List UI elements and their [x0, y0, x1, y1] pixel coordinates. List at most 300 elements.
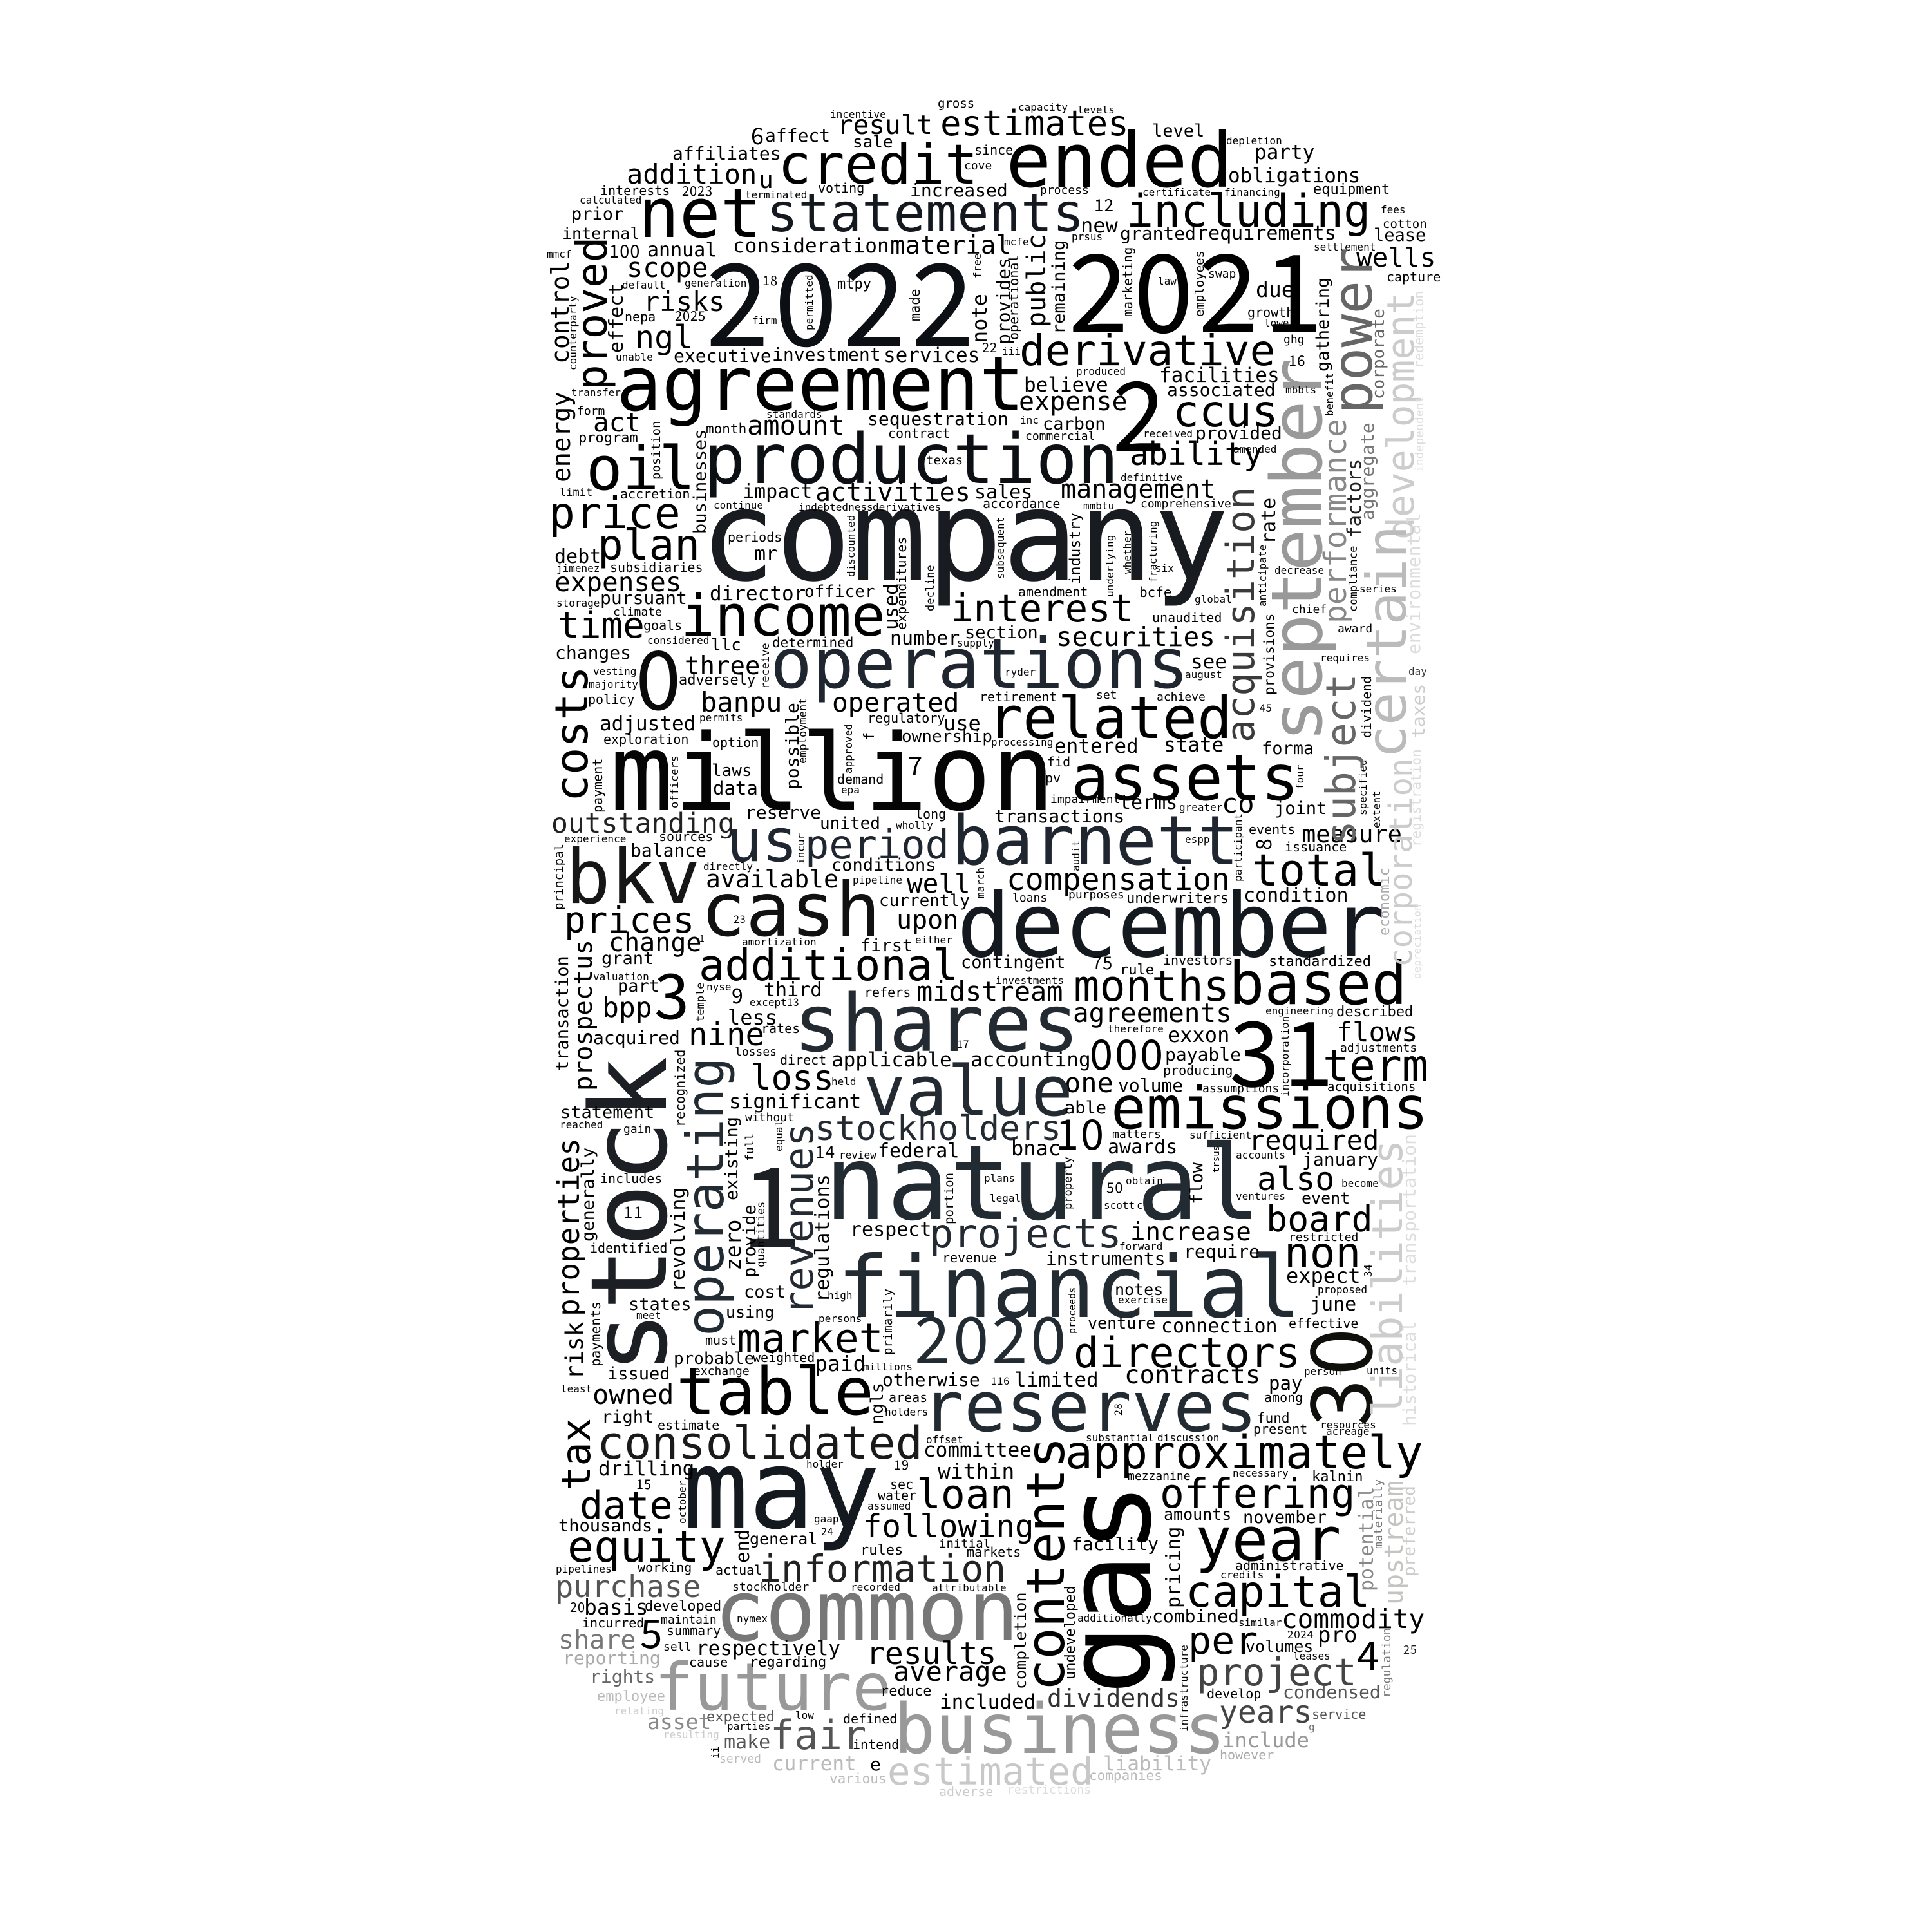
vertical words: participant	[1232, 813, 1244, 882]
small horizontal words: statements	[766, 183, 1084, 244]
small horizontal words: level	[1152, 121, 1204, 141]
small horizontal words: settlement	[1314, 241, 1376, 253]
small horizontal words: markets	[967, 1544, 1021, 1560]
small horizontal words: standardized	[1269, 954, 1371, 970]
small horizontal words: outstanding	[551, 808, 735, 840]
vertical words: undeveloped	[1063, 1586, 1079, 1680]
vertical words: subsequent	[994, 517, 1007, 579]
small horizontal words: standards	[766, 408, 822, 421]
small horizontal words: periods	[728, 529, 782, 545]
pale vertical words along the right edge: liabilities	[1364, 1140, 1412, 1417]
small horizontal words: emissions	[1111, 1075, 1428, 1142]
small horizontal words: continue	[714, 499, 763, 511]
small horizontal words: commodity	[1282, 1604, 1425, 1634]
small horizontal words: sources	[659, 829, 713, 844]
small horizontal words: described	[1336, 1004, 1413, 1020]
small horizontal words: among	[1264, 1390, 1303, 1405]
vertical words: recognized	[672, 1050, 688, 1127]
pale vertical words along the right edge: corporate	[1369, 308, 1388, 399]
small horizontal words: award	[1338, 622, 1372, 636]
small horizontal words: mmbtu	[1083, 500, 1114, 512]
small horizontal words: commercial	[1025, 430, 1095, 443]
word: business: business	[894, 1690, 1226, 1770]
small horizontal words: reserve	[745, 802, 821, 823]
small horizontal words: including	[1126, 185, 1370, 238]
vertical words: energy	[547, 392, 576, 482]
small horizontal words: credit	[778, 133, 978, 197]
small horizontal words: long	[915, 806, 946, 822]
word: may: may	[683, 1426, 880, 1554]
pale vertical words along the right edge: registration	[1408, 749, 1424, 847]
gray words along the lower edge: rights	[590, 1666, 655, 1687]
small horizontal words: thousands	[558, 1516, 652, 1536]
small horizontal words: general	[750, 1530, 817, 1548]
small horizontal words: expense	[1019, 387, 1128, 417]
small horizontal words: associated	[1167, 379, 1276, 401]
small horizontal words: significant	[729, 1090, 861, 1113]
word: future: future	[654, 1649, 891, 1726]
small horizontal words: espp	[1185, 833, 1210, 846]
small horizontal words: activities	[815, 478, 971, 507]
small horizontal words: vesting	[593, 665, 636, 677]
small horizontal words: venture	[1088, 1314, 1155, 1332]
small horizontal words: engineering	[1265, 1005, 1334, 1017]
small horizontal words: forward	[1119, 1240, 1162, 1253]
small horizontal words: value	[864, 1052, 1073, 1132]
word: production: production	[704, 420, 1119, 500]
small horizontal words: securities	[1056, 621, 1215, 652]
small horizontal words: due	[1256, 277, 1294, 302]
small horizontal words: june	[1310, 1293, 1356, 1316]
vertical words: provide	[740, 1204, 760, 1278]
pale vertical words along the right edge: independent	[1413, 396, 1426, 473]
small horizontal words: subsidiaries	[610, 560, 703, 575]
small horizontal words: without	[745, 1111, 794, 1124]
small horizontal words: right	[601, 1407, 654, 1427]
small horizontal words: upon	[896, 905, 958, 935]
small horizontal words: 2023	[682, 181, 713, 200]
gray words along the lower edge: expected	[706, 1709, 775, 1725]
vertical words: decline	[924, 565, 937, 611]
small horizontal words: equity	[567, 1522, 726, 1573]
small horizontal words: pipeline	[853, 874, 902, 886]
vertical words: remaining	[1049, 240, 1069, 334]
small horizontal words: c	[1137, 1199, 1143, 1211]
small horizontal words: results	[866, 1636, 996, 1672]
vertical words: effect	[605, 283, 628, 353]
small horizontal words: estimate	[658, 1417, 719, 1433]
small horizontal words: achieve	[1157, 690, 1206, 704]
vertical words: regulations	[811, 1174, 834, 1302]
small horizontal words: chief	[1292, 603, 1327, 616]
vertical words: tax	[553, 1418, 600, 1490]
small horizontal words: 24	[821, 1523, 833, 1539]
small horizontal words: scope	[627, 252, 708, 283]
word: 2022: 2022	[706, 214, 980, 379]
pale vertical words along the right edge	[1318, 247, 1429, 1605]
gray words along the lower edge: adverse	[939, 1784, 993, 1799]
vertical words: four	[1294, 764, 1306, 790]
small horizontal words: since	[974, 142, 1013, 158]
small horizontal words: 25	[1403, 1641, 1417, 1658]
gray words along the lower edge: include	[1222, 1728, 1309, 1752]
vertical words: fracturing	[1147, 521, 1159, 583]
vertical words: transaction	[553, 956, 573, 1071]
small horizontal words: available	[706, 865, 838, 893]
small horizontal words: using	[726, 1303, 774, 1321]
small horizontal words: working	[638, 1560, 692, 1575]
small horizontal words: annual	[647, 239, 717, 261]
small horizontal words: except	[750, 996, 787, 1009]
small horizontal words: prior	[571, 204, 623, 224]
small horizontal words: 100	[609, 238, 641, 263]
small horizontal words: proposed	[1318, 1283, 1367, 1296]
small horizontal words: party	[1255, 141, 1314, 164]
word: december: december	[957, 874, 1385, 978]
small horizontal words: produced	[1076, 365, 1126, 377]
small horizontal words: assumed	[867, 1500, 911, 1512]
small horizontal words: lease	[1374, 225, 1426, 245]
small horizontal words: time	[558, 605, 645, 647]
small horizontal words: interests	[600, 183, 670, 198]
small horizontal words: condition	[1244, 884, 1349, 907]
small horizontal words: cause	[689, 1654, 728, 1670]
small horizontal words: swap	[1208, 267, 1236, 281]
small horizontal words: offering	[1160, 1470, 1355, 1517]
small horizontal words: compensation	[1007, 862, 1230, 898]
small horizontal words: definitive	[1121, 471, 1182, 484]
small horizontal words: nepa	[625, 309, 656, 325]
vertical words: property	[1062, 1157, 1075, 1209]
small horizontal words: 13	[787, 994, 799, 1009]
small horizontal words: mbbls	[1285, 384, 1316, 396]
gray words along the lower edge: g	[1309, 1721, 1315, 1733]
small horizontal words: well	[907, 868, 971, 899]
vertical words: generally	[578, 1148, 598, 1242]
small horizontal words: summary	[667, 1623, 721, 1638]
small horizontal words: stockholder	[732, 1580, 809, 1594]
word: natural: natural	[824, 1123, 1262, 1244]
small horizontal words: combined	[1152, 1605, 1239, 1627]
pale vertical words along the right edge: transportation	[1399, 1134, 1420, 1286]
small horizontal words: purposes	[1068, 888, 1124, 902]
pale vertical words along the right edge: subject	[1318, 674, 1365, 845]
small horizontal words: federal	[878, 1140, 959, 1162]
small horizontal words: firm	[752, 314, 777, 327]
vertical words: provisions	[1262, 614, 1277, 695]
vertical words: quantities	[755, 1202, 768, 1267]
pale vertical words along the right edge: aggregate	[1357, 422, 1378, 520]
small horizontal words: meet	[636, 1309, 661, 1321]
vertical words: 30	[1274, 1325, 1397, 1426]
small horizontal words: fid	[1047, 754, 1070, 770]
small horizontal words: accordance	[983, 496, 1060, 511]
small horizontal words: required	[1249, 1124, 1379, 1156]
small horizontal words: valuation	[593, 971, 649, 983]
small horizontal words: within	[938, 1459, 1014, 1484]
vertical words: operating	[676, 1057, 735, 1336]
small horizontal words: debt	[554, 545, 601, 568]
small horizontal words: 2	[1112, 339, 1170, 478]
gray words along the lower edge: project	[1197, 1650, 1357, 1694]
small horizontal words: series	[1359, 583, 1397, 595]
small horizontal words: stockholders	[815, 1109, 1061, 1148]
small horizontal words: cash	[701, 867, 880, 954]
small horizontal words: form	[577, 404, 605, 418]
small horizontal words: affiliates	[672, 143, 781, 164]
small horizontal words: banpu	[701, 687, 782, 718]
vertical words: regulation	[1380, 1628, 1394, 1698]
vertical words: flow	[1187, 1162, 1207, 1204]
vertical words: specified	[1357, 759, 1369, 815]
word: estimated: estimated	[887, 1749, 1094, 1794]
small horizontal words: global	[1195, 593, 1232, 605]
small horizontal words: january	[1302, 1149, 1378, 1170]
small horizontal words: weighted	[753, 1350, 815, 1365]
small horizontal words: credits	[1220, 1569, 1264, 1581]
small horizontal words: instruments	[1046, 1248, 1165, 1269]
small horizontal words: august	[1185, 668, 1222, 681]
small horizontal words: addition	[627, 158, 757, 190]
small horizontal words: comprehensive	[1141, 497, 1231, 511]
small horizontal words: date	[580, 1483, 672, 1528]
small horizontal words: resources	[1320, 1419, 1376, 1431]
small horizontal words: forma	[1262, 739, 1314, 759]
small horizontal words: certificate	[1142, 186, 1211, 198]
pale vertical words along the right edge: taxes	[1408, 684, 1429, 738]
small horizontal words: projects	[929, 1210, 1122, 1257]
word: company: company	[700, 463, 1229, 609]
small horizontal words: 23	[734, 911, 746, 926]
small horizontal words: unable	[616, 351, 653, 363]
small horizontal words: third	[764, 979, 822, 1001]
small horizontal words: table	[676, 1354, 874, 1430]
vertical words: proved	[567, 237, 617, 390]
small horizontal words: 000	[1090, 1021, 1165, 1082]
small horizontal words: lower	[1264, 317, 1296, 329]
vertical words: completion	[1011, 1592, 1030, 1689]
small horizontal words: obtain	[1126, 1175, 1163, 1187]
small horizontal words: wholly	[896, 819, 933, 831]
vertical words: march	[974, 867, 987, 898]
small horizontal words: set	[1096, 688, 1117, 702]
small horizontal words: 20	[570, 1597, 585, 1616]
small horizontal words: derivatives	[873, 501, 941, 513]
small horizontal words: issued	[607, 1364, 670, 1384]
small horizontal words: mcfe	[1004, 236, 1029, 248]
pale vertical words along the right edge: development	[1379, 292, 1423, 540]
small horizontal words: intend	[853, 1737, 899, 1752]
pale vertical words along the right edge: factors	[1343, 459, 1365, 538]
small horizontal words: dividends	[1047, 1684, 1180, 1712]
word: 2021: 2021	[1068, 207, 1328, 364]
small horizontal words: limited	[1014, 1368, 1099, 1392]
small horizontal words: respect	[850, 1218, 931, 1241]
word: common: common	[714, 1562, 1019, 1660]
vertical words: contents	[1016, 1437, 1077, 1691]
small horizontal words: information	[759, 1547, 1006, 1591]
small horizontal words: assumptions	[1202, 1082, 1279, 1095]
small horizontal words: u	[759, 166, 773, 194]
small horizontal words: also	[1257, 1160, 1334, 1198]
small horizontal words: day	[1408, 665, 1427, 677]
small horizontal words: period	[805, 821, 949, 868]
gray words along the lower edge: current	[772, 1752, 857, 1776]
small horizontal words: increase	[1130, 1218, 1251, 1247]
small horizontal words: 12	[1094, 193, 1114, 216]
small horizontal words: epa	[841, 784, 860, 796]
small horizontal words: facilities	[1159, 364, 1280, 387]
small horizontal words: notes	[1115, 1280, 1163, 1299]
gray words along the lower edge: purchase	[555, 1569, 701, 1605]
small horizontal words: total	[1252, 845, 1386, 896]
small horizontal words: 1	[699, 932, 705, 945]
small horizontal words: accounts	[1236, 1149, 1285, 1161]
small horizontal words: increased	[910, 180, 1008, 201]
vertical words: portion	[942, 1173, 956, 1224]
small horizontal words: applicable	[831, 1048, 952, 1072]
small horizontal words: operated	[832, 687, 959, 718]
small horizontal words: 19	[894, 1455, 909, 1473]
small horizontal words: cove	[964, 159, 992, 173]
vertical words: equal	[773, 1121, 785, 1151]
small horizontal words: 7	[908, 746, 923, 783]
small horizontal words: mezzanine	[1128, 1470, 1191, 1483]
small horizontal words: contracts	[1124, 1361, 1260, 1390]
small horizontal words: matters	[1112, 1128, 1161, 1141]
small horizontal words: affect	[765, 125, 830, 146]
small horizontal words: nymex	[737, 1613, 768, 1625]
vertical words: made	[907, 289, 923, 321]
pale vertical words along the right edge: preferred	[1400, 1486, 1419, 1577]
small horizontal words: incurred	[582, 1615, 644, 1631]
vertical words: marketing	[1120, 247, 1135, 317]
small horizontal words: texas	[926, 453, 963, 468]
small horizontal words: less	[728, 1005, 777, 1030]
small horizontal words: included	[940, 1690, 1036, 1714]
small horizontal words: related	[988, 685, 1232, 752]
small horizontal words: 16	[1289, 350, 1305, 370]
small horizontal words: ventures	[1236, 1190, 1285, 1202]
small horizontal words: fees	[1381, 204, 1406, 216]
small horizontal words: per	[1188, 1618, 1258, 1663]
vertical words: existing	[722, 1117, 742, 1200]
small horizontal words: bcfe	[1139, 585, 1172, 600]
small horizontal words: able	[1065, 1098, 1106, 1118]
small horizontal words: first	[860, 936, 913, 956]
small horizontal words: prices	[564, 900, 694, 942]
small horizontal words: ccus	[1173, 386, 1278, 437]
small horizontal words: facility	[1072, 1533, 1159, 1555]
small horizontal words: directors	[1074, 1329, 1300, 1378]
small horizontal words: unaudited	[1152, 610, 1222, 625]
gray words along the lower edge: make	[724, 1731, 770, 1754]
small horizontal words: legal	[990, 1192, 1021, 1204]
vertical words: october	[676, 1480, 688, 1524]
small horizontal words: transfer	[571, 386, 621, 399]
small horizontal words: 2020	[914, 1289, 1069, 1382]
vertical words: temple	[694, 983, 707, 1022]
small horizontal words: determined	[772, 635, 853, 650]
pale vertical words along the right edge: depreciation	[1411, 904, 1423, 979]
gray words along the lower edge: relating	[614, 1705, 664, 1717]
word: financial: financial	[837, 1238, 1302, 1338]
small horizontal words: identified	[590, 1240, 667, 1256]
small horizontal words: three	[685, 652, 760, 681]
small horizontal words: consolidated	[597, 1417, 923, 1470]
small horizontal words: iii	[1002, 345, 1021, 357]
small horizontal words: respectively	[696, 1637, 840, 1660]
vertical words: ii	[709, 1747, 721, 1759]
vertical words: incorporation	[1279, 1016, 1291, 1097]
small horizontal words: one	[1065, 1067, 1113, 1099]
small horizontal words: option	[712, 735, 759, 750]
small horizontal words: volume	[1118, 1075, 1183, 1096]
small horizontal words: midstream	[916, 976, 1063, 1007]
small horizontal words: new	[1081, 213, 1119, 238]
word: operations: operations	[770, 624, 1189, 705]
small horizontal words: similar	[1238, 1616, 1282, 1629]
small horizontal words: ownership	[902, 727, 992, 746]
small horizontal words: received	[1143, 428, 1193, 440]
vertical words: public	[1022, 234, 1052, 327]
small horizontal words: majority	[589, 678, 638, 690]
small horizontal words: producing	[1163, 1063, 1233, 1078]
vertical words: full	[743, 1133, 757, 1161]
small horizontal words: see	[1191, 650, 1227, 674]
small horizontal words: retirement	[980, 689, 1057, 705]
small horizontal words: acreage	[1326, 1425, 1369, 1437]
pale vertical words along the right edge: redemption	[1411, 291, 1426, 368]
small horizontal words: offset	[926, 1434, 963, 1446]
small horizontal words: inc	[1020, 414, 1039, 426]
vertical words: risk	[561, 1322, 589, 1379]
small horizontal words: november	[1243, 1508, 1327, 1528]
small horizontal words: units	[1367, 1365, 1397, 1377]
small horizontal words: direct	[780, 1052, 826, 1068]
small horizontal words: ryder	[1005, 666, 1036, 678]
small horizontal words: co	[1222, 788, 1255, 819]
small horizontal words: jimenez	[556, 562, 600, 574]
small horizontal words: defined	[843, 1711, 897, 1727]
small horizontal words: amendment	[1018, 584, 1088, 600]
small horizontal words: 50	[1106, 1177, 1123, 1197]
small horizontal words: rules	[860, 1542, 903, 1558]
small horizontal words: 4	[1357, 1624, 1381, 1681]
small horizontal words: additional	[699, 940, 958, 990]
small horizontal words: estimates	[940, 103, 1129, 144]
small horizontal words: contract	[888, 426, 950, 441]
small horizontal words: mtpy	[837, 276, 871, 292]
small horizontal words: ghg	[1283, 333, 1305, 346]
small horizontal words: ngl	[635, 319, 693, 356]
small horizontal words: part	[618, 976, 659, 996]
small horizontal words: rates	[761, 1021, 800, 1036]
small horizontal words: pro	[1318, 1622, 1357, 1648]
pale vertical words along the right edge: certain	[1355, 526, 1419, 759]
word: agreement: agreement	[616, 340, 1025, 428]
small horizontal words: approximately	[1065, 1426, 1423, 1479]
small horizontal words: states	[629, 1294, 692, 1314]
small horizontal words: interest	[951, 586, 1133, 630]
vertical words: acquisition	[1218, 487, 1264, 743]
small horizontal words: data	[713, 777, 758, 799]
small horizontal words: e	[870, 1754, 881, 1775]
gray words along the lower edge: restrictions	[1007, 1783, 1091, 1797]
small horizontal words: basis	[584, 1595, 648, 1620]
small horizontal words: llc	[711, 636, 741, 655]
small horizontal words: material	[890, 231, 1011, 260]
